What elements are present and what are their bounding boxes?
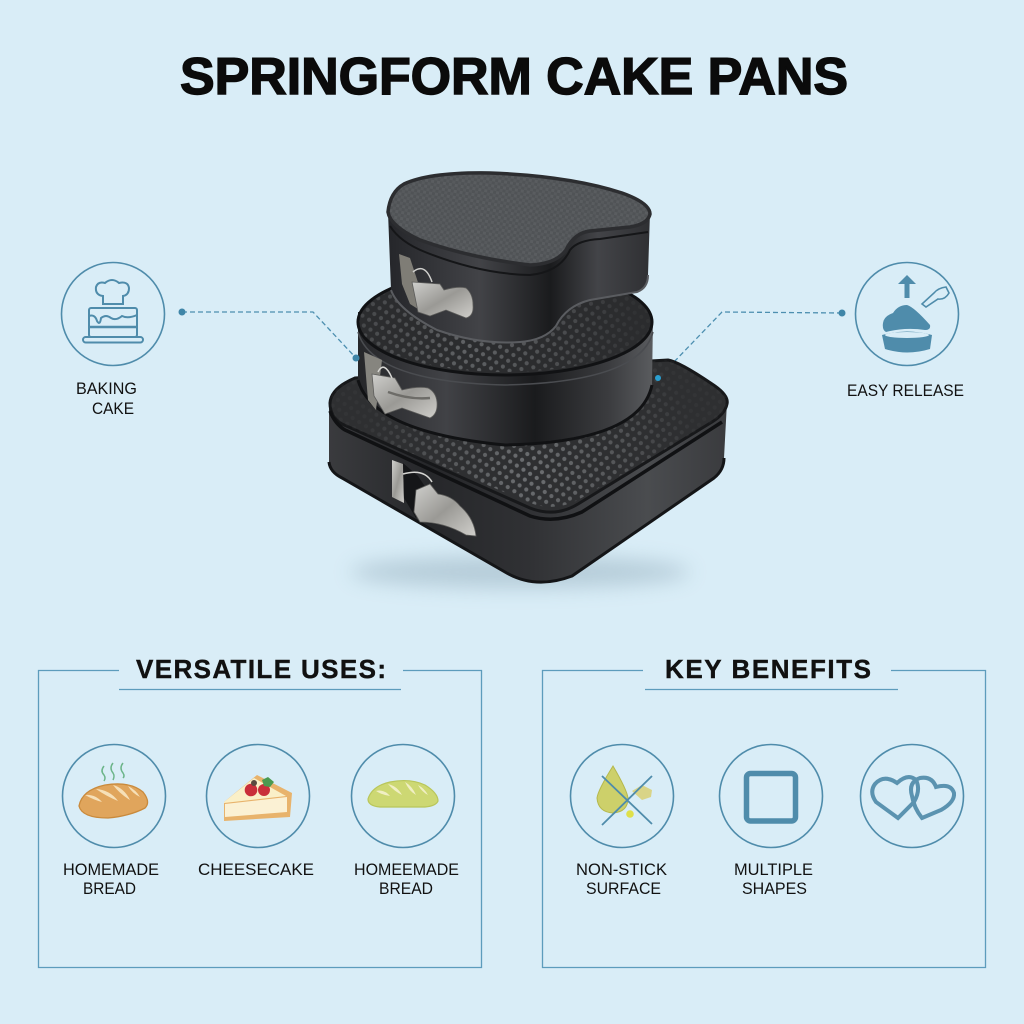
label: cheesecake: CHEESECAKE xyxy=(198,860,314,879)
panel: versatile uses xyxy=(38,654,482,968)
label: multiple shapes: SHAPES xyxy=(742,879,807,898)
label: non-stick surface: SURFACE xyxy=(586,879,661,898)
label: multiple shapes: MULTIPLE xyxy=(734,860,813,879)
callout line: easy release xyxy=(673,310,846,363)
square pan xyxy=(320,350,740,582)
label: homemade bread: HOMEMADE xyxy=(63,860,159,879)
label: homemade bread: BREAD xyxy=(83,879,136,898)
label: baking cake: BAKING xyxy=(76,379,137,398)
square pan latch xyxy=(392,460,476,536)
shadow xyxy=(350,556,690,588)
heart pan xyxy=(388,173,650,342)
icon: bread xyxy=(62,744,166,848)
label: non-stick surface: NON-STICK xyxy=(576,860,668,879)
heart pan latch xyxy=(399,254,473,318)
panel: key benefits xyxy=(542,654,986,968)
heading: key benefits: KEY BENEFITS xyxy=(665,654,871,684)
callout line: baking cake xyxy=(178,308,356,358)
icon: easy release xyxy=(856,262,958,366)
label: homemade bread xyxy=(63,860,159,898)
callout dot on square pan xyxy=(655,375,661,381)
heading: versatile uses: VERSATILE USES: xyxy=(136,654,386,684)
label: homeemade bread xyxy=(354,860,459,898)
icon: hearts xyxy=(860,744,964,848)
round pan xyxy=(356,287,654,446)
product: stacked springform pans xyxy=(320,173,740,588)
callout dot on round pan xyxy=(352,354,360,362)
icon: baking cake xyxy=(62,262,164,366)
icon: non-stick xyxy=(570,744,674,848)
label: homeemade bread: HOMEEMADE xyxy=(354,860,459,879)
label: homeemade bread: BREAD xyxy=(379,879,433,898)
title: SPRINGFORM CAKE PANS xyxy=(180,48,848,106)
label: baking cake xyxy=(76,379,137,418)
label: easy release: EASY RELEASE xyxy=(847,381,964,400)
round pan latch xyxy=(364,352,437,418)
icon: cheesecake xyxy=(206,744,310,848)
label: non-stick surface xyxy=(576,860,668,898)
icon: square shape xyxy=(720,744,822,848)
icon: green bread xyxy=(352,744,454,848)
label: multiple shapes xyxy=(734,860,813,898)
label: baking cake: CAKE xyxy=(92,399,134,418)
